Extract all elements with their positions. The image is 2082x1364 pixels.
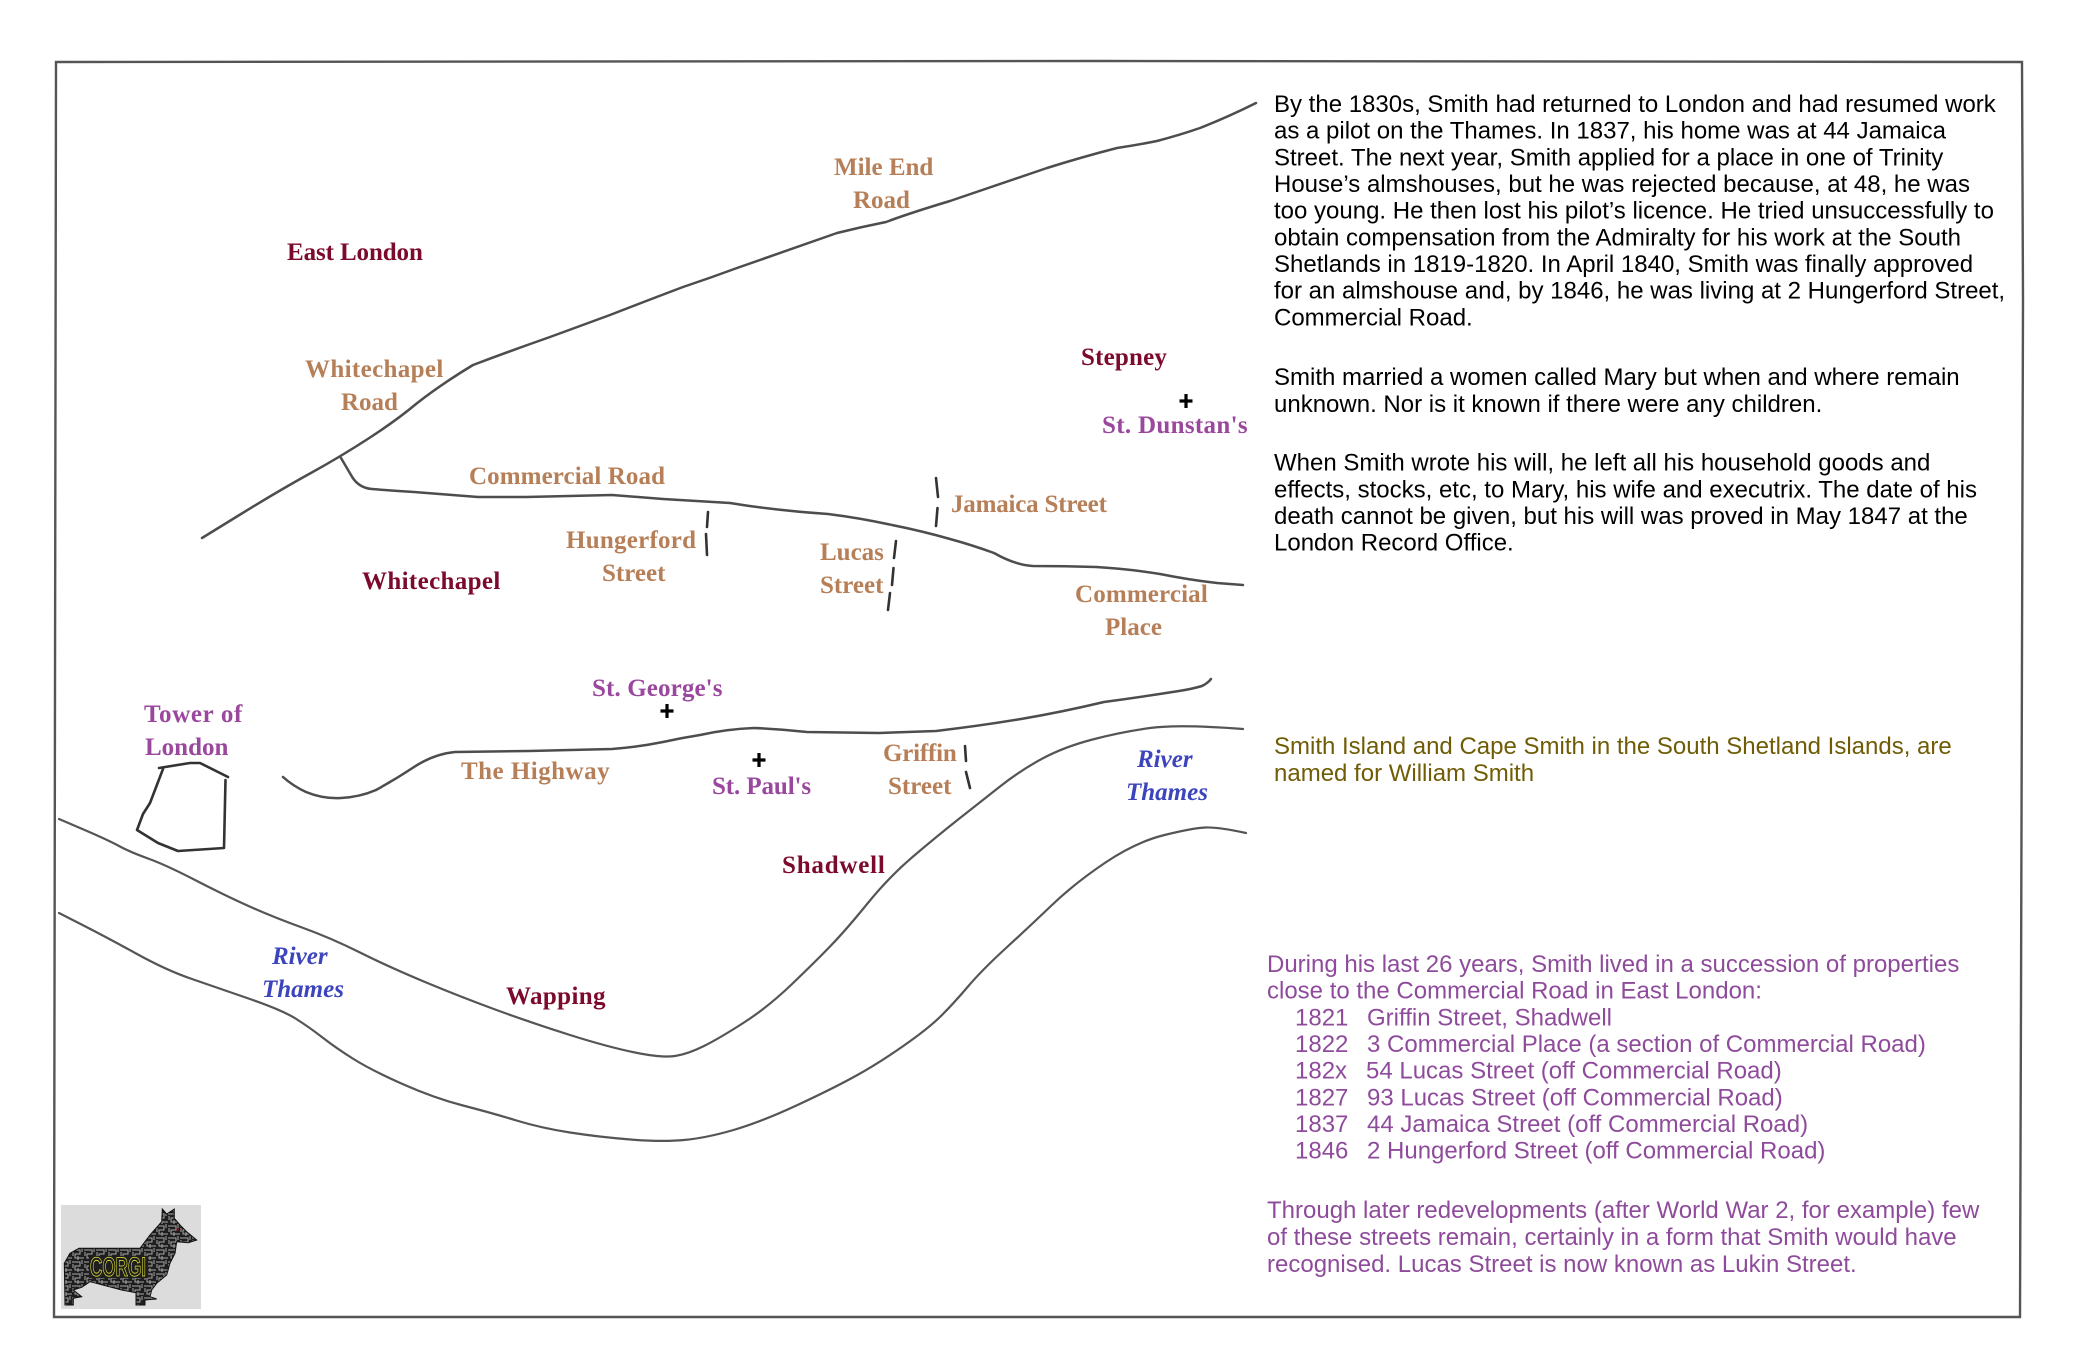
text block: Smith's return to London: Shetlands in 1819-1820. In April 1840, Smith was finally approved (1274, 251, 1973, 278)
text block: list of residences: 1822 (1295, 1031, 1348, 1058)
label: Tower of London: London (145, 734, 228, 761)
label: East London: East London (287, 239, 423, 266)
church cross: St. George's (660, 704, 674, 718)
label: River Thames east: River (1137, 746, 1193, 773)
street tick: Hungerford Street (706, 512, 708, 555)
road: The Highway (283, 679, 1211, 798)
text block: list of residences: 93 Lucas Street (off Commercial Road) (1367, 1084, 1783, 1111)
street tick: Lucas Street (888, 541, 896, 610)
river: Thames south bank (59, 827, 1246, 1141)
text block: list of residences: Griffin Street, Shadwell (1367, 1004, 1612, 1031)
road: Whitechapel Road and Mile End Road (202, 103, 1256, 538)
church cross: St. Dunstan's (1180, 394, 1192, 408)
label: Mile End Road: Road (853, 187, 910, 214)
text block: Smith's return to London: as a pilot on the Thames. In 1837, his home was at 44 Jamaica (1274, 118, 1947, 145)
street tick: Jamaica Street (936, 478, 938, 526)
label: Griffin Street: Street (888, 773, 952, 800)
text block: Smith's return to London: By the 1830s, Smith had returned to London and had resumed work (1274, 91, 1996, 118)
icon: Tower of London outline (137, 763, 228, 851)
label: The Highway: The Highway (461, 758, 610, 785)
text block: list of residences: 182x (1295, 1058, 1347, 1085)
label: Whitechapel Road: Road (341, 389, 398, 416)
label: River Thames east: Thames (1126, 779, 1208, 806)
text block: Smith's return to London: Commercial Road. (1274, 304, 1473, 331)
text block: will: When Smith wrote his will, he left all his household goods and (1274, 450, 1930, 477)
label: River Thames west: River (272, 943, 328, 970)
label: St. Dunstan's: St. Dunstan's (1102, 412, 1248, 439)
text block: will: effects, stocks, etc, to Mary, his wife and executrix. The date of his (1274, 476, 1977, 503)
label: St. Paul's: St. Paul's (712, 773, 811, 800)
icon: corgi logo (61, 1205, 201, 1309)
road: Commercial Road (341, 458, 1243, 585)
label: Stepney: Stepney (1081, 344, 1167, 371)
text block: list of residences: 1821 (1295, 1004, 1348, 1031)
text block: Smith's return to London: Street. The next year, Smith applied for a place in one of Trinity (1274, 144, 1943, 171)
label: Lucas Street: Street (820, 572, 884, 599)
river: Thames north bank (59, 726, 1243, 1057)
label: Lucas Street: Lucas (820, 539, 884, 566)
label: Commercial Place: Place (1105, 614, 1162, 641)
church cross: St. Paul's (752, 753, 766, 767)
text block: Smith's return to London: obtain compensation from the Admiralty for his work at the South (1274, 224, 1961, 251)
text block: list of residences: 54 Lucas Street (off Commercial Road) (1366, 1058, 1782, 1085)
text block: list of residences: 1837 (1295, 1111, 1348, 1138)
text block: list of residences: 44 Jamaica Street (off Commercial Road) (1367, 1111, 1808, 1138)
text block: later redevelopments: of these streets remain, certainly in a form that Smith would have (1267, 1224, 1957, 1251)
text block: Smith's return to London: too young. He then lost his pilot’s licence. He tried unsuccessfully to (1274, 198, 1994, 225)
label: Mile End Road: Mile End (834, 154, 933, 181)
label: Whitechapel: Whitechapel (362, 568, 501, 595)
label: Commercial Place: Commercial (1075, 581, 1208, 608)
street tick: Griffin Street (965, 746, 970, 788)
label: Tower of London: Tower of (144, 701, 243, 728)
text block: marriage: Smith married a women called Mary but when and where remain (1274, 364, 1960, 391)
icon: corgi logo: CORGI (90, 1252, 146, 1282)
label: Griffin Street: Griffin (883, 740, 957, 767)
text block: will: death cannot be given, but his will was proved in May 1847 at the (1274, 503, 1968, 530)
text block: later redevelopments: Through later redevelopments (after World War 2, for example) few (1267, 1197, 1979, 1224)
label: Wapping: Wapping (506, 983, 606, 1010)
text block: list of residences: 1827 (1295, 1084, 1348, 1111)
label: Commercial Road: Commercial Road (469, 463, 665, 490)
label: Hungerford Street: Street (602, 560, 666, 587)
label: River Thames west: Thames (262, 976, 344, 1003)
label: Hungerford Street: Hungerford (566, 527, 696, 554)
text block: list of residences: 2 Hungerford Street (off Commercial Road) (1367, 1138, 1825, 1165)
text block: Smith's return to London: for an almshouse and, by 1846, he was living at 2 Hungerford Street, (1274, 278, 2005, 305)
label: Whitechapel Road: Whitechapel (305, 356, 444, 383)
text block: Smith's return to London: House’s almshouses, but he was rejected because, at 48, he was (1274, 171, 1970, 198)
text block: will: London Record Office. (1274, 530, 1514, 557)
label: Shadwell: Shadwell (782, 852, 886, 879)
label: Jamaica Street: Jamaica Street (951, 491, 1108, 518)
text block: list of residences: close to the Commercial Road in East London: (1267, 978, 1762, 1005)
callout: Smith Island and Cape Smith: Smith Island and Cape Smith in the South Shetland Islands, are (1274, 733, 1952, 760)
label: St. George's: St. George's (592, 675, 723, 702)
text block: later redevelopments: recognised. Lucas Street is now known as Lukin Street. (1267, 1251, 1857, 1278)
icon: corgi eye (176, 1228, 179, 1231)
callout: Smith Island and Cape Smith: named for William Smith (1274, 760, 1534, 787)
text block: marriage: unknown. Nor is it known if there were any children. (1274, 391, 1822, 418)
text block: list of residences: 1846 (1295, 1138, 1348, 1165)
text block: list of residences: During his last 26 years, Smith lived in a succession of properties (1267, 951, 1959, 978)
text block: list of residences: 3 Commercial Place (a section of Commercial Road) (1367, 1031, 1926, 1058)
